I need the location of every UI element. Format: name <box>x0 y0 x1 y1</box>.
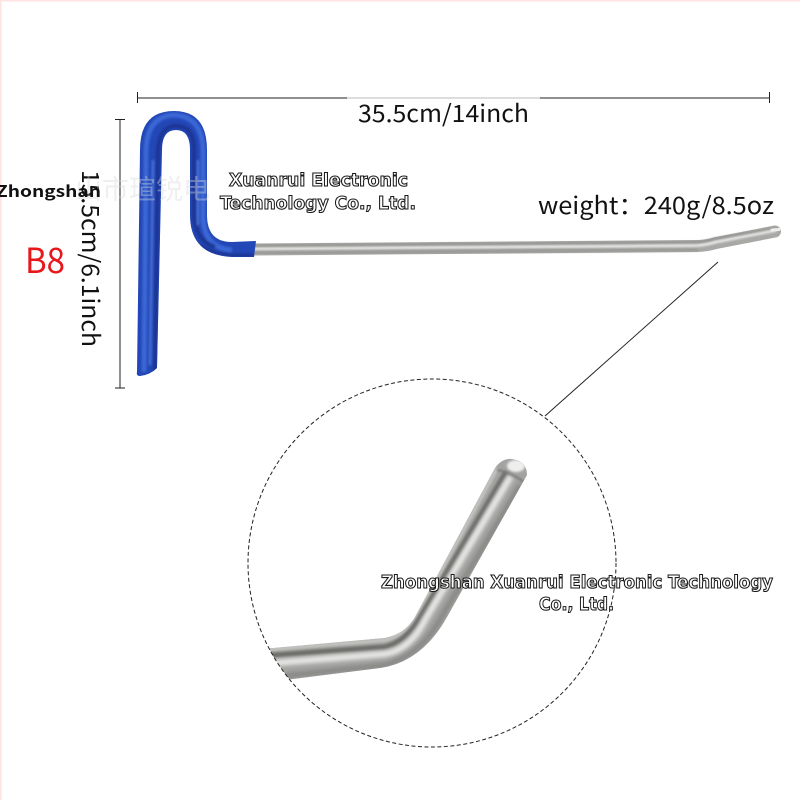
height label: 15.5cm/6.1inch <box>75 170 110 347</box>
watermark company name top: Xuanrui Electronic <box>229 170 408 191</box>
zoom circle <box>248 379 616 747</box>
tool: blue handle <box>136 111 256 376</box>
watermark: 山市瑄锐电 <box>75 168 210 207</box>
watermark company name bottom <box>381 572 773 615</box>
weight label: weight：240g/8.5oz <box>538 186 774 221</box>
watermark company name bottom: Zhongshan Xuanrui Electronic Technology <box>381 572 773 593</box>
enlarged tip <box>270 458 527 680</box>
watermark company name top: Technology Co., Ltd. <box>220 193 416 214</box>
width label: 35.5cm/14inch <box>358 94 529 129</box>
model label: B8 <box>25 233 65 284</box>
leader line <box>545 262 718 416</box>
width dimension line <box>138 92 770 103</box>
tool: steel shaft <box>252 228 779 253</box>
watermark company name top <box>220 170 416 214</box>
watermark company name bottom: Co., Ltd. <box>539 594 614 615</box>
height dimension line <box>115 119 125 388</box>
